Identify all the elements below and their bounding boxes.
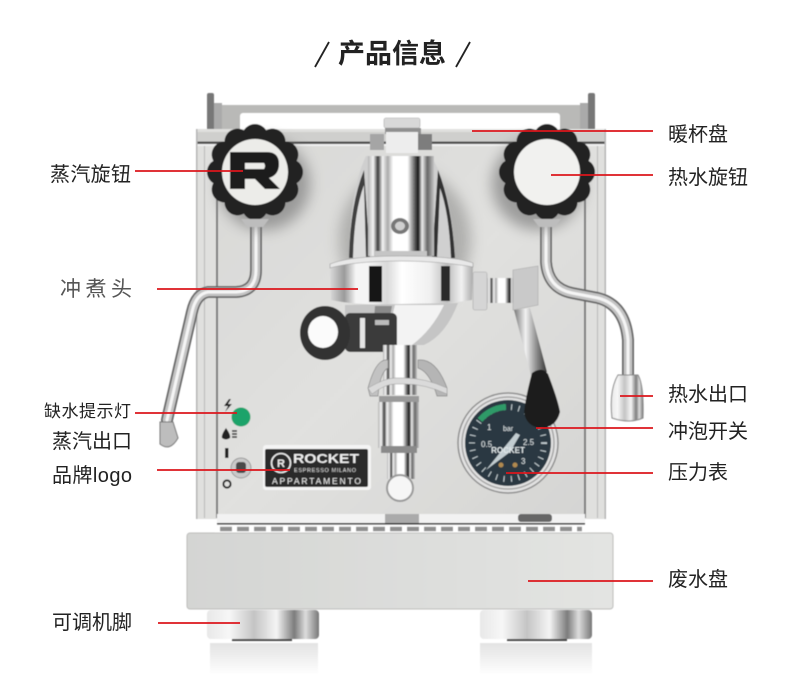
brew group column [349, 118, 455, 261]
callout: 热水出口 [620, 383, 748, 406]
left foot [207, 610, 319, 641]
pressure gauge: ROCKET [491, 446, 525, 455]
coffee machine photo [160, 93, 643, 675]
pressure gauge [458, 393, 558, 493]
toggle switch [231, 458, 251, 478]
pressure gauge: 2.5 [523, 438, 535, 447]
group collar [330, 256, 487, 310]
brand badge: R [277, 458, 285, 470]
hot water knob shadow [492, 138, 584, 230]
portafilter body [345, 303, 458, 395]
right knob stem and hot water wand [546, 225, 628, 374]
callout: 可调机脚: 可调机脚 [52, 611, 132, 634]
pressure gauge: bar [503, 426, 514, 433]
label: 蒸汽出口: 蒸汽出口 [52, 430, 132, 453]
portafilter spouts [368, 360, 447, 501]
steam knob shadow [218, 138, 310, 230]
callout: 压力表: 压力表 [668, 461, 728, 484]
brand badge: ESPRESSO MILANO [294, 468, 357, 474]
callout: 缺水提示灯: 缺水提示灯 [44, 402, 131, 421]
pressure gauge: 1 [487, 423, 492, 432]
left knob stem and steam wand [167, 225, 256, 420]
title: 产品信息 [338, 39, 446, 69]
callout: 废水盘: 废水盘 [668, 568, 728, 591]
callout: 热水出口: 热水出口 [668, 383, 748, 406]
machine body panel [196, 129, 606, 519]
foot reflections [210, 643, 592, 675]
brand badge: APPARTAMENTO [272, 476, 361, 486]
hot water tip [611, 375, 643, 421]
drip tray [187, 533, 613, 609]
callout: 品牌logo: 品牌logo [52, 464, 132, 487]
portafilter handle knob [300, 306, 350, 360]
callout: 热水旋钮: 热水旋钮 [668, 166, 748, 189]
pressure gauge: 3 [521, 457, 526, 466]
status symbols [222, 399, 237, 488]
hot water knob [499, 124, 595, 227]
steam tip [160, 422, 178, 447]
callout: 蒸汽旋钮: 蒸汽旋钮 [50, 163, 131, 186]
right connector to lever [487, 266, 547, 376]
callout: 冲煮头: 冲煮头 [60, 278, 132, 301]
pressure gauge: 0.5 [481, 440, 493, 449]
green indicator light [232, 408, 250, 426]
right foot [480, 610, 592, 641]
brand badge [263, 445, 371, 490]
brew lever handle [524, 370, 560, 428]
lower window and grate [215, 514, 587, 534]
callout: 暖杯盘: 暖杯盘 [668, 123, 728, 146]
title [315, 39, 470, 69]
callout: 冲泡开关: 冲泡开关 [668, 420, 748, 443]
rear cup rail [207, 93, 595, 137]
steam knob [207, 124, 303, 227]
group head shadow [339, 168, 471, 312]
brand badge: ROCKET [293, 451, 359, 466]
